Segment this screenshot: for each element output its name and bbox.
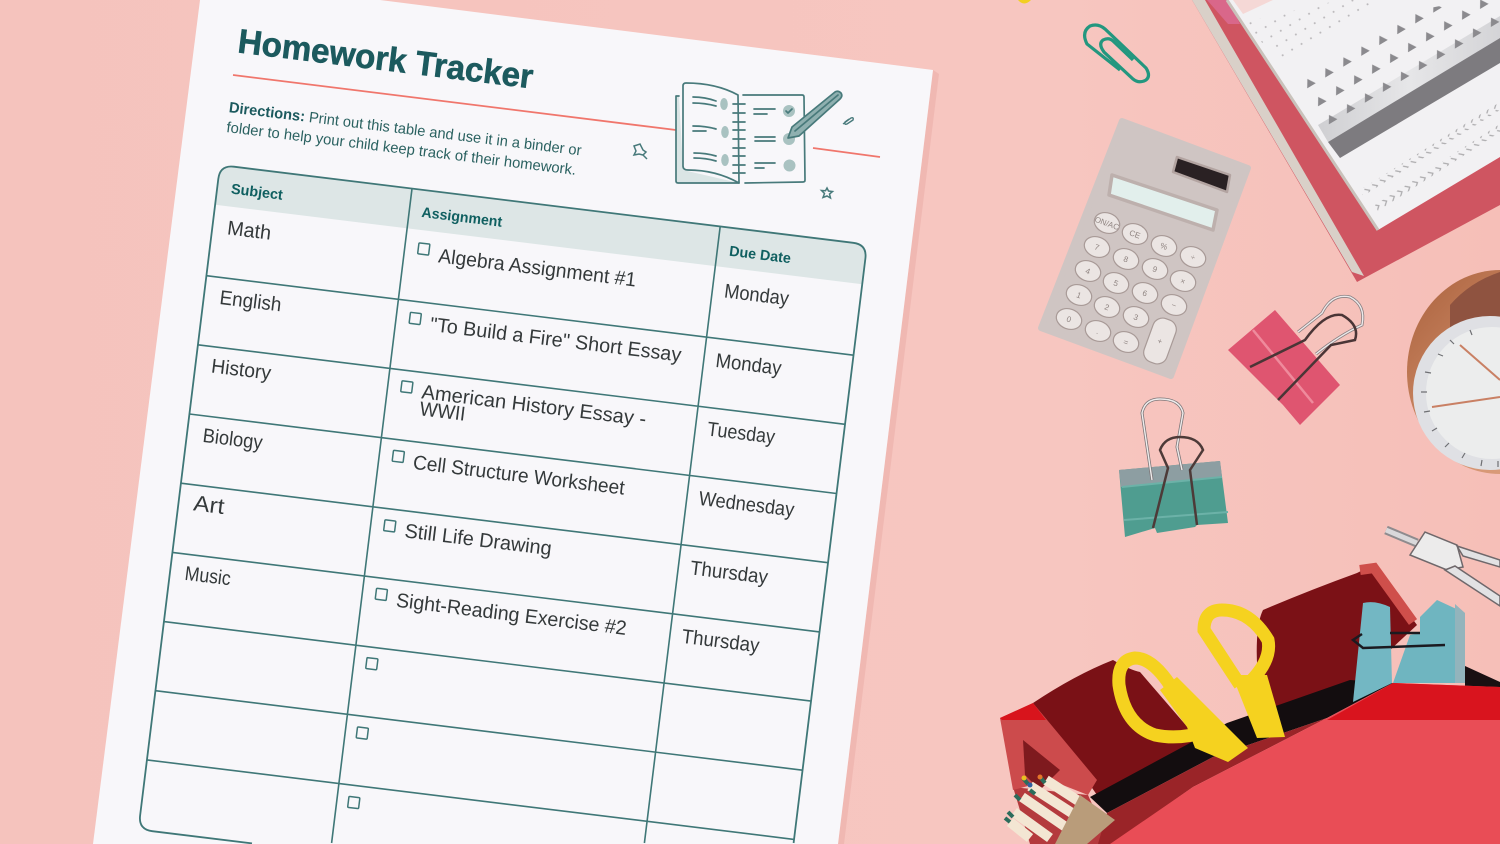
calculator keys: = (1122, 337, 1130, 348)
blue sharpener (1353, 600, 1465, 702)
calculator keys: + (1156, 336, 1164, 347)
right roll edge (1360, 568, 1413, 622)
subject entries: History (210, 356, 272, 385)
due dates: Thursday (681, 626, 761, 657)
dark grey band (1328, 38, 1500, 158)
assignment entries: Sight-Reading Exercise #2 (395, 590, 628, 640)
subject entries: Math (226, 217, 272, 245)
yellow clip fragment (1018, 0, 1031, 4)
pale pink corner (1233, 0, 1273, 14)
table headers: Subject (230, 182, 284, 204)
backpack (1000, 565, 1500, 844)
pencils (1005, 774, 1115, 844)
zipper far right (1465, 666, 1500, 690)
calculator keys: − (1170, 300, 1178, 311)
table headers: Assignment (421, 205, 503, 231)
dotted pattern (1245, 0, 1380, 62)
calculator keys: 0 (1065, 314, 1073, 325)
left roll edge (1000, 703, 1097, 795)
icon: push pin (634, 144, 647, 159)
compass (1386, 530, 1500, 606)
checkboxes (348, 243, 430, 809)
front pocket (1110, 683, 1500, 844)
calculator keys: 3 (1132, 312, 1140, 323)
calculator keys: . (1095, 327, 1100, 336)
calculator keys: ON/AC (1093, 215, 1120, 232)
clock ticks (1421, 330, 1498, 467)
calculator keys (1053, 209, 1209, 367)
scissors handle right (1204, 610, 1285, 738)
due dates: Thursday (689, 557, 769, 589)
notebook page edge (1192, 0, 1364, 276)
due dates: Wednesday (698, 488, 795, 521)
subject entries: Art (192, 490, 226, 519)
calculator keys: 9 (1151, 264, 1159, 275)
assignment entries: "To Build a Fire" Short Essay (429, 314, 683, 367)
calculator keys: 4 (1084, 266, 1092, 277)
pencil case strap behind pencils (1013, 787, 1110, 844)
calculator keys: % (1159, 241, 1169, 252)
due dates (681, 281, 795, 657)
due dates: Monday (714, 350, 783, 380)
calculator keys: ÷ (1189, 252, 1197, 263)
zipper interior (1090, 680, 1393, 813)
green paper clip (1085, 25, 1148, 82)
calculator keys: 6 (1141, 288, 1149, 299)
notebook (1192, 0, 1500, 282)
chevrons (1360, 102, 1500, 211)
directions text: folder to help your child keep track of their homework. (226, 119, 577, 179)
cardboard tube (1055, 795, 1115, 844)
calculator keys: 7 (1093, 242, 1101, 253)
notebook cover page (1227, 0, 1500, 230)
notebook pink tab (1207, 0, 1240, 24)
subject entries (184, 217, 283, 590)
subject entries: English (218, 287, 283, 316)
zipper flap (1098, 718, 1327, 844)
calculator (1041, 121, 1248, 376)
clock face (1413, 316, 1500, 470)
assignment entries: Cell Structure Worksheet (412, 452, 626, 500)
subject entries: Music (184, 563, 232, 590)
scissors handle left (1119, 658, 1248, 762)
icon: small paper clip (843, 118, 853, 124)
subject entries: Biology (202, 425, 264, 454)
worksheet paper (93, 0, 939, 844)
assignment entries: Algebra Assignment #1 (437, 245, 637, 291)
calculator solar panel (1173, 157, 1230, 192)
icon: star (822, 188, 832, 198)
table headers (230, 182, 792, 267)
assignment entries: Still Life Drawing (403, 520, 553, 560)
assignment entries: American History Essay - (420, 381, 647, 431)
directions text: Directions: Print out this table and use it in a binder or (228, 99, 582, 159)
red rules (233, 75, 880, 157)
clock hands (1432, 345, 1500, 407)
table (140, 167, 866, 843)
assignment entries: WWII (418, 398, 467, 426)
clock (1407, 270, 1500, 474)
calculator display (1109, 175, 1217, 230)
green binder clip (1119, 399, 1228, 537)
front pocket top band (1327, 683, 1500, 720)
due dates: Monday (723, 281, 790, 310)
left fabric roll (1033, 660, 1205, 795)
calculator keys: 2 (1103, 302, 1111, 313)
assignment entries (395, 245, 683, 640)
pink binder clip (1228, 296, 1363, 425)
table headers: Due Date (728, 244, 792, 267)
right fabric roll (1257, 565, 1417, 715)
due dates: Tuesday (706, 418, 776, 449)
calculator keys: CE (1128, 228, 1142, 241)
calculator keys: × (1179, 276, 1187, 287)
calculator keys: 1 (1075, 290, 1083, 301)
icon: notebook with pencil (676, 83, 842, 183)
calculator keys: 8 (1122, 254, 1130, 265)
calculator keys: 5 (1112, 278, 1120, 289)
light grey band (1318, 16, 1500, 142)
title: Homework Tracker (236, 22, 535, 96)
